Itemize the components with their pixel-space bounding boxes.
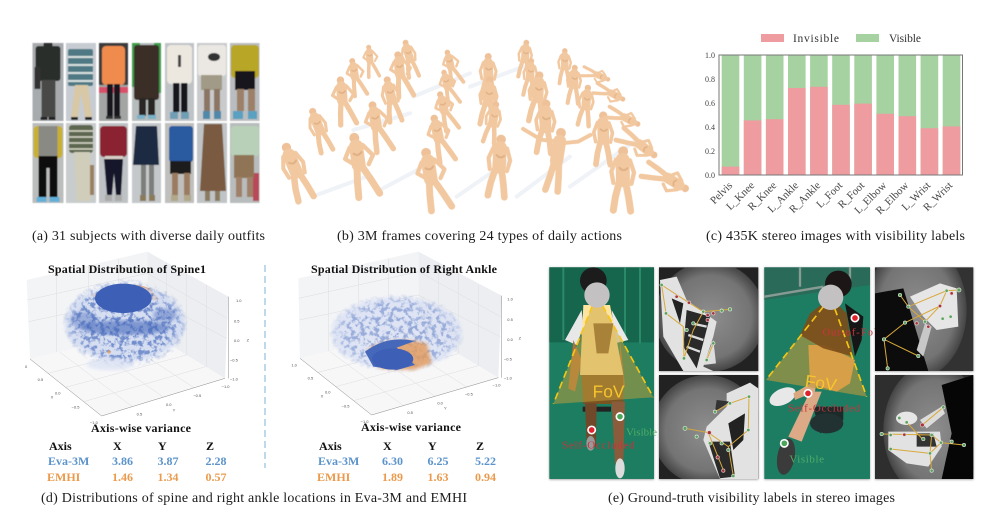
table: right ankle axis-wise variance: Axis [319,439,342,453]
table: spine axis-wise variance: 0.57 [206,470,226,484]
y axis labels: 0.0 [705,171,715,180]
axis tick labels: 0.5 [308,376,314,381]
table: right ankle axis-wise variance: X [383,439,392,453]
axis tick labels: 0.0 [507,337,514,342]
dashed divider [264,265,266,468]
table: spine axis-wise variance: 1.46 [112,470,133,484]
caption d: (d) Distributions of spine and right ankle locations in Eva-3M and EMHI [41,491,467,506]
axis tick labels: −0.5 [230,357,239,362]
table: spine axis-wise variance [47,421,226,484]
table: spine axis-wise variance: X [113,439,122,453]
caption e: (e) Ground-truth visibility labels in stereo images [608,491,895,506]
x axis labels: R_Foot [836,180,867,211]
body figures [276,38,693,212]
panel: stereo view top right [874,266,975,373]
floor shadows [317,67,637,197]
table: right ankle axis-wise variance: Y [428,439,437,453]
scatter points [330,294,463,372]
photo: subject 14 mint tee [230,123,260,203]
table: spine axis-wise variance: 1.34 [158,470,178,484]
panel: stereo view bottom right [874,374,975,481]
out of FoV marker [851,314,859,322]
axis tick labels: −1.0 [361,419,369,424]
FoV cone: FoV [593,381,625,401]
axis tick labels: X [321,394,324,399]
table: right ankle axis-wise variance: 0.94 [475,470,496,484]
axis tick labels: −0.5 [504,356,513,361]
y axis labels: 0.2 [705,147,715,156]
table: spine axis-wise variance: EMHI [47,470,81,484]
axis tick labels: −0.5 [342,403,350,408]
axis tick labels: 0.0 [234,338,240,343]
axis tick labels: 0.5 [407,410,414,415]
photo scene [549,267,654,479]
x axis labels: L_Foot [814,180,845,211]
occluded marker [588,426,595,434]
axis tick labels: 0.5 [38,377,44,382]
axis tick labels: −1.0 [222,384,230,389]
photo: subject 6 white tee and shorts [197,43,227,121]
axis tick labels: 0 [25,364,28,369]
caption c: (c) 435K stereo images with visibility labels [706,229,965,244]
panel: visibility stacked bar chart [705,33,962,217]
photo: subject 11 navy dress [132,123,161,203]
panel: stereo view bottom left [652,375,762,485]
axis tick labels: −1.0 [90,420,99,425]
y axis labels: 1.0 [705,51,715,60]
axis tick labels: Y [444,406,447,411]
axis tick labels: 0.5 [507,317,514,322]
axis tick labels: −1.0 [504,375,513,380]
occluded marker [804,390,812,397]
panel: right ankle scatter plot [291,252,522,424]
x axis labels: L_Wrist [899,180,933,213]
axis tick labels: 1.0 [507,297,514,302]
table: right ankle axis-wise variance: Eva-3M [318,454,359,468]
x axis labels: Pelvis [708,180,735,207]
axis tick labels: 0.0 [437,401,444,406]
axis tick labels [291,297,522,424]
axis tick labels: 0.0 [166,402,172,407]
axis tick labels: 0.5 [137,412,143,417]
axis tick labels: −0.5 [72,405,80,410]
panel: spine scatter plot [25,252,250,425]
table: spine axis-wise variance: Y [158,439,167,453]
panel: seated subject photo with FoV [764,267,882,479]
table: right ankle axis-wise variance [317,420,496,484]
axis tick labels [25,298,250,425]
panel: 3D body meshes [276,38,693,212]
axis tick labels: −1.0 [230,376,239,381]
panel: stereo view top left [655,262,765,372]
table: spine axis-wise variance: 3.86 [112,454,133,468]
axis tick labels: 0.5 [234,318,240,323]
table: right ankle axis-wise variance: 5.22 [475,454,496,468]
title: spine distribution: Spatial Distribution of Spine1 [48,262,206,276]
axes panes [27,252,228,416]
panel: subjects photo grid [32,43,260,203]
visible marker [781,440,788,447]
photo: subject 3 orange sweater [99,43,128,121]
legend: Invisible [793,33,839,45]
FoV cone [766,297,867,397]
x axis labels: R_Knee [746,179,779,213]
anonymised head [584,282,610,308]
axis tick labels: −1.0 [493,383,501,388]
photo scene [764,267,870,479]
axis tick labels: −0.5 [465,391,474,396]
photo: subject 7 yellow sweater [230,43,260,121]
title: right ankle distribution: Spatial Distribution of Right Ankle [311,262,498,276]
x axis labels [708,179,955,217]
FoV cone: FoV [804,371,838,395]
table: spine axis-wise variance: Axis-wise variance [91,421,192,435]
label self-occluded: Self-Occluded [562,439,635,451]
y axis labels: 0.6 [705,99,715,108]
table: right ankle axis-wise variance: 1.63 [428,470,448,484]
table: spine axis-wise variance: Z [206,439,214,453]
axis tick labels: −0.5 [193,393,202,398]
label self-occluded: Self-Occluded [788,403,860,415]
x axis labels: L_Elbow [852,179,889,217]
x axis labels: R_Elbow [874,179,911,217]
axis tick labels: X [51,395,54,400]
photo: subject 8 grey vest [32,123,64,203]
axis tick labels: Y [173,407,176,412]
label out-of-FoV: Out-of-FoV [822,326,882,338]
axis tick labels: Z [519,336,522,341]
table: spine axis-wise variance: Eva-3M [48,454,89,468]
photo: subject 2 checked shirt [66,43,96,121]
axis tick labels: 1.0 [291,363,298,368]
axis tick labels: 0.0 [55,391,61,396]
photo: subject 9 striped sweater [66,123,96,203]
table: right ankle axis-wise variance: 6.25 [428,454,448,468]
scatter points [62,279,188,371]
table: spine axis-wise variance: 2.28 [206,454,226,468]
legend: Visible [889,33,921,45]
FoV cone [553,295,653,404]
photo: subject 10 red sweatshirt [99,123,128,203]
y axis labels [705,51,715,180]
photo: subject 1 dark jacket [32,43,64,121]
photo: subject 5 white sweater [165,43,194,121]
bars [722,55,960,175]
label visible: Visible [789,453,824,465]
x axis labels: R_Wrist [921,180,955,214]
table: spine axis-wise variance: 3.87 [158,454,178,468]
caption a: (a) 31 subjects with diverse daily outfits [32,229,265,244]
photo: subject 4 long brown coat [132,43,161,121]
axis tick labels: 0.0 [325,389,331,394]
axis tick labels: 1.0 [236,298,242,303]
y axis labels: 0.8 [705,75,715,84]
table: spine axis-wise variance: Axis [49,439,72,453]
photo: subject 12 blue jersey [165,123,194,203]
visible marker [616,413,624,420]
caption b: (b) 3M frames covering 24 types of daily actions [337,229,622,244]
x axis labels: L_Ankle [765,179,801,215]
panel: standing subject photo with FoV [549,267,657,479]
photo: subject 13 long brown dress [197,123,227,203]
y axis labels: 0.4 [705,123,715,132]
axis tick labels: Z [247,337,250,342]
table: right ankle axis-wise variance: 1.89 [382,470,403,484]
table: right ankle axis-wise variance: 6.30 [382,454,403,468]
legend [761,33,921,45]
x axis labels: R_Ankle [787,179,823,216]
axes frame [719,55,962,175]
x axis labels: L_Knee [724,179,757,213]
label visible: Visible [626,427,657,439]
table: right ankle axis-wise variance: EMHI [317,470,351,484]
table: right ankle axis-wise variance: Axis-wise variance [361,420,462,434]
anonymised head [818,285,843,310]
table: right ankle axis-wise variance: Z [476,439,484,453]
axes panes [298,252,502,415]
